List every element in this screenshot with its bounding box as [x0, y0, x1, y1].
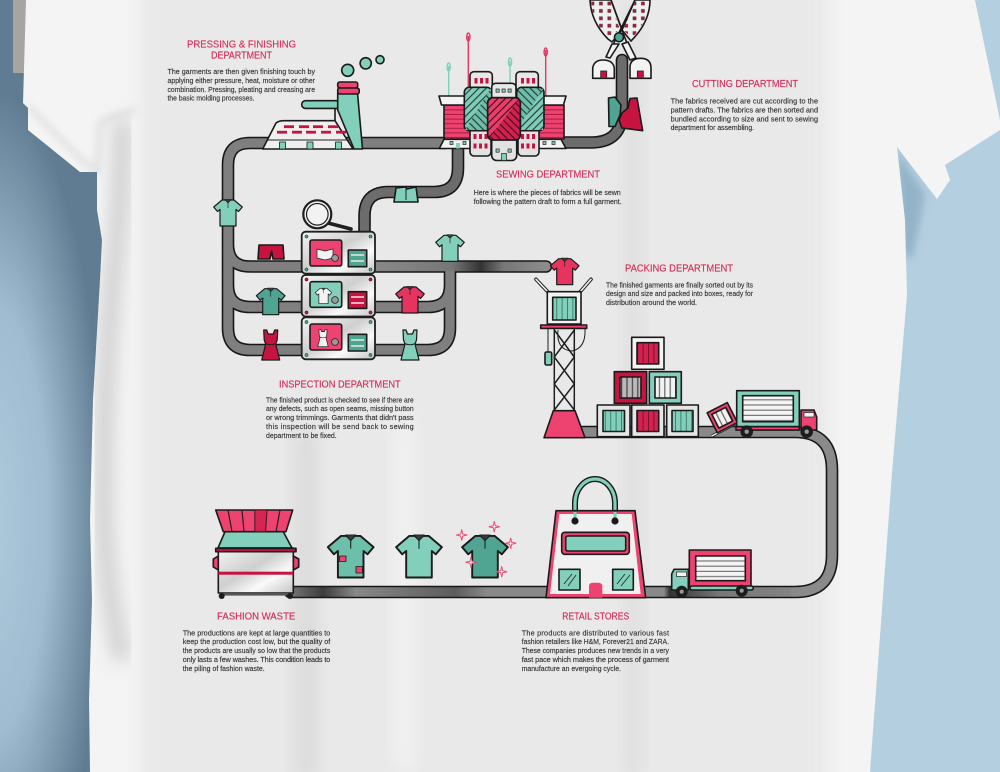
crate bottom right	[667, 405, 698, 437]
text: fashion waste: only lasts a few washes. This condition leads to	[183, 655, 330, 664]
text: retail stores: The products are distributed to various fast	[522, 628, 669, 637]
illustration: scissors (cutting)	[590, 0, 651, 131]
text: inspection department	[266, 378, 414, 440]
illustration: small truck	[672, 550, 753, 598]
icon: teal shirt on right pipe	[436, 235, 464, 261]
text: retail stores	[522, 611, 669, 673]
crate bottom left	[597, 405, 630, 437]
text: fashion waste: keep the production cost low, but the quality of	[183, 637, 331, 646]
text: fashion waste	[183, 611, 331, 673]
illustration: delivery truck with ramp	[707, 391, 817, 438]
iron handle arm	[302, 101, 341, 108]
text: cutting department: CUTTING DEPARTMENT	[692, 78, 799, 90]
text: packing department: design and size and packed into boxes, ready for	[606, 289, 754, 298]
crate mid right	[649, 372, 681, 403]
icon: crimson dress	[262, 330, 280, 360]
illustration: inspection machine	[302, 200, 375, 359]
tower lattice	[554, 328, 574, 410]
text: fashion waste: the products are usually so low that the products	[183, 646, 331, 655]
text: packing department: The finished garments are finally sorted out by its	[606, 280, 753, 289]
needles	[447, 33, 547, 96]
dumpster lid	[216, 510, 293, 532]
iron column	[338, 93, 362, 149]
fabric piece on pipe	[394, 187, 418, 202]
dumpster base and wheels	[219, 593, 293, 599]
store windows	[559, 569, 633, 590]
text: inspection department: department to be fixed.	[266, 431, 337, 440]
text: inspection department: The finished product is checked to see if there are	[266, 395, 414, 404]
icon: frayed shirt	[396, 535, 442, 578]
text: cutting department	[671, 78, 818, 132]
tower crate	[547, 292, 581, 324]
truck chassis	[736, 427, 799, 430]
stacked crates	[597, 337, 698, 437]
iron dashes	[277, 125, 346, 134]
truck wheels	[740, 425, 813, 438]
text: sewing department: following the pattern draft to form a full garment.	[474, 197, 622, 206]
dumpster body	[218, 548, 293, 593]
text: sewing department: SEWING DEPARTMENT	[496, 169, 601, 181]
text: cutting department: pattern drafts. The fabrics are then sorted and	[671, 106, 818, 114]
truck cab	[801, 410, 817, 430]
text: inspection department: this inspection will be send back to sewing	[266, 422, 414, 431]
pipes: production conveyor network	[228, 60, 832, 592]
iron pink cap	[338, 82, 359, 94]
inspection panel 3	[302, 317, 375, 359]
dumpster side handles	[213, 556, 299, 570]
text: retail stores: fashion retailers like H&M, Forever21 and ZARA.	[522, 637, 669, 646]
text: cutting department: department for assembling.	[671, 123, 754, 132]
text: pressing and finishing department: DEPARTMENT	[211, 50, 272, 62]
text: inspection department: any defects, such as open seams, missing button	[266, 404, 414, 413]
text: fashion waste: The productions are kept at large quantities to	[183, 628, 330, 637]
icon: worn shirt with patches	[328, 535, 374, 578]
store sign	[562, 532, 629, 554]
inspection panel 1	[302, 232, 375, 274]
lower sections	[470, 128, 539, 160]
shirts: wear stages	[328, 521, 516, 578]
inspection panel 2	[302, 275, 375, 316]
teal thread rolls	[464, 87, 492, 131]
text: pressing and finishing department: combination. Pressing, pleating and creasing are	[168, 85, 315, 94]
illustration: packing tower	[536, 279, 591, 438]
tower arms	[536, 279, 591, 292]
text: cutting department: The fabrics received are cut according to the	[671, 97, 818, 106]
iron feet	[280, 142, 342, 149]
illustration: dumpster	[213, 510, 299, 599]
text: pressing and finishing department	[168, 38, 316, 103]
top caps	[470, 72, 538, 101]
text: cutting department: bundled according to size and sent to sewing	[671, 114, 818, 123]
small truck wheels	[676, 585, 748, 598]
scissor blades	[590, 0, 622, 42]
text: inspection department: INSPECTION DEPARTMENT	[279, 378, 401, 390]
tower platform	[541, 325, 587, 328]
scissor pivot	[614, 33, 624, 42]
text: pressing and finishing department: the basic molding processes.	[168, 94, 254, 103]
illustration: retail store shopping bag	[546, 479, 646, 598]
text: retail stores: RETAIL STORES	[562, 611, 629, 623]
text: pressing and finishing department: PRESSING & FINISHING	[187, 38, 296, 50]
iron steam bubbles	[342, 56, 384, 76]
crate top	[632, 337, 664, 369]
text: retail stores: These companies produces new trends in a very	[522, 646, 669, 655]
text: pressing and finishing department: applying either pressure, heat, moisture or other	[168, 76, 316, 85]
truck cargo box	[737, 391, 799, 427]
magnifying glass	[303, 200, 351, 229]
text: packing department: PACKING DEPARTMENT	[625, 263, 734, 275]
icon: teal dress	[401, 330, 419, 360]
icon: pink shirt	[396, 286, 424, 313]
small truck cargo box	[689, 550, 751, 587]
icon: teal shirt on left pipe	[214, 199, 242, 226]
text: packing department: distribution around the world.	[606, 298, 697, 307]
garments on inspection lines	[214, 199, 579, 360]
text: sewing department	[474, 169, 622, 206]
dumpster teal interior	[218, 532, 292, 548]
cut fabric pieces	[608, 97, 621, 126]
icon: new shirt with sparkles	[456, 521, 516, 578]
text: retail stores: fast pace which makes the process of garment	[522, 655, 669, 664]
side thread spools	[444, 105, 472, 139]
tilted crate	[707, 403, 737, 433]
store door	[589, 583, 602, 598]
icon: crimson shorts	[258, 245, 284, 259]
scissor handles	[593, 60, 614, 78]
small truck cab	[672, 569, 688, 590]
tower hook tag	[547, 328, 549, 352]
text: fashion waste: FASHION WASTE	[217, 611, 295, 623]
iron soleplate body	[263, 121, 353, 149]
illustration: iron (pressing)	[263, 56, 384, 149]
text: fashion waste: the piling of fashion waste.	[183, 664, 265, 673]
handle sockets and strap ends	[571, 512, 619, 525]
text: sewing department: Here is where the pieces of fabrics will be sewn	[474, 188, 621, 197]
crate bottom middle	[632, 405, 664, 437]
crate mid left	[614, 372, 647, 403]
text: retail stores: manufacture an evergoing cycle.	[522, 664, 621, 673]
text: inspection department: or wrong trimmings. Garments that didn't pass	[266, 413, 414, 422]
icon: pink shirt above packing tower	[550, 258, 579, 285]
text: pressing and finishing department: The garments are then given finishing touch by	[168, 67, 315, 76]
bag body	[546, 511, 646, 598]
ramp	[712, 423, 737, 436]
small truck chassis	[690, 586, 753, 590]
tower pink base	[544, 411, 585, 438]
text: packing department	[606, 263, 754, 307]
illustration: sewing machine	[439, 33, 566, 160]
bag handle	[575, 479, 615, 521]
icon: dark teal shirt	[256, 288, 285, 315]
center pink thread roll	[488, 98, 520, 140]
